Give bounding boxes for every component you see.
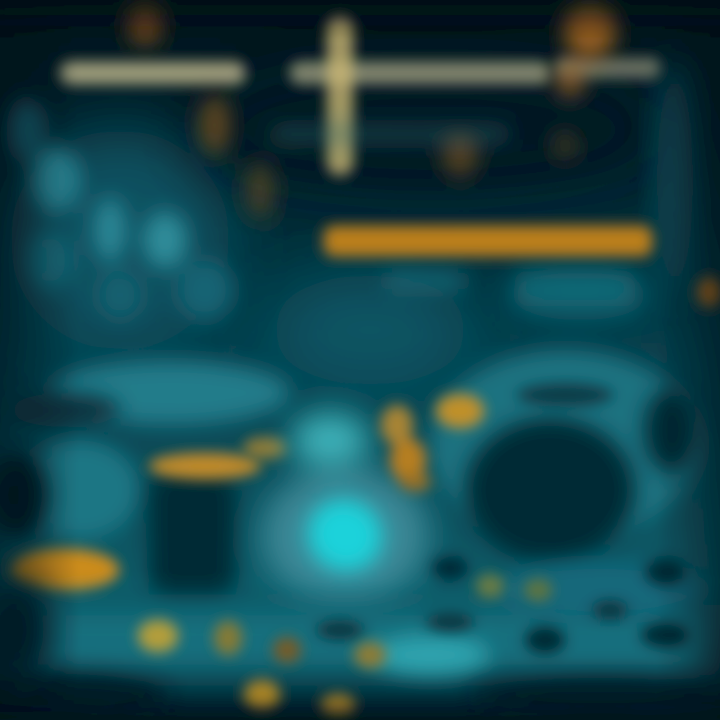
left platform [0,361,290,540]
orange accents above and below title [127,0,616,218]
subtitle bar [324,226,652,256]
right edge orange marker [698,277,720,307]
bands under subtitle [385,272,635,306]
gold coin left [11,549,119,591]
background: dark and teal haze [10,60,693,385]
left crystal columns [7,100,233,320]
title glow [60,15,660,175]
lower network bubbles [0,556,720,717]
central glowing pool [260,412,430,605]
small gold coins [138,574,552,718]
left dark cup with gold rim [149,437,287,600]
right heart-shaped ring [430,350,700,562]
central gold cluster [381,394,484,491]
